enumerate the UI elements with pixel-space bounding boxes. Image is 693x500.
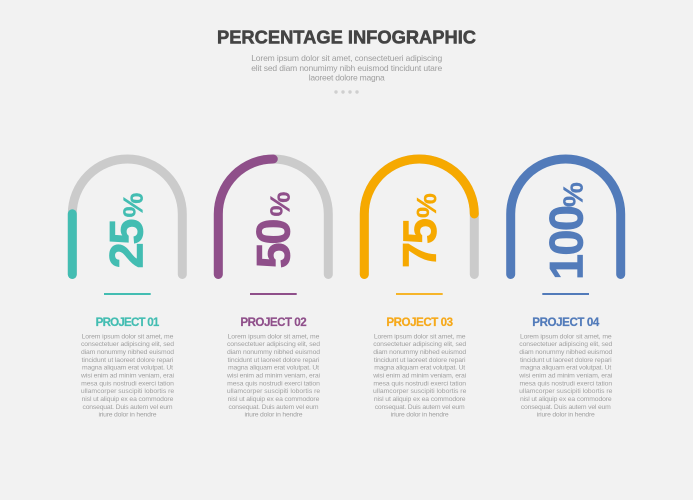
body text: iriure dolor in hendre xyxy=(537,412,595,419)
body text: tincidunt ut laoreet dolore repari xyxy=(520,357,612,364)
body text: magna aliquam erat volutpat. Ut xyxy=(520,365,611,372)
body text: wisi enim ad minim veniam, erai xyxy=(226,373,320,380)
body text: mesa quis nostrudi exerci tation xyxy=(81,380,174,387)
subtitle: laoreet dolore magna xyxy=(309,73,385,83)
body text: consectetuer adipiscing elit, sed xyxy=(373,341,466,348)
value 100%: % xyxy=(558,182,589,207)
body text xyxy=(226,333,320,419)
body text: nisl ut aliquip ex ea commodore xyxy=(374,396,466,403)
body text: wisi enim ad minim veniam, erai xyxy=(372,373,467,380)
body text xyxy=(518,333,613,419)
body text: diam nonummy nibhed euismod xyxy=(519,349,613,356)
divider xyxy=(250,293,297,295)
body text: diam nonummy nibhed euismod xyxy=(373,349,466,356)
body text: ullamcorper suscipiti lobortis re xyxy=(81,388,174,395)
heading: PROJECT 01 xyxy=(96,316,160,329)
body text: mesa quis nostrudi exerci tation xyxy=(227,380,320,387)
body text: nisl ut aliquip ex ea commodore xyxy=(520,396,612,403)
value 50%: % xyxy=(264,192,295,216)
body text: ullamcorper suscipiti lobortis re xyxy=(519,388,613,395)
panel: project 02 xyxy=(218,159,328,419)
value 75% xyxy=(393,193,446,268)
panel: project 04 xyxy=(511,159,621,419)
body text: Lorem ipsum dolor sit amet, me xyxy=(228,333,320,340)
value 75%: % xyxy=(411,193,442,218)
subtitle: Lorem ipsum dolor sit amet, consectetueri adipiscing xyxy=(251,53,442,63)
value 100%: 100 xyxy=(540,205,593,280)
body text: consequat. Duis autem vel eum xyxy=(375,404,465,411)
body text: consequat. Duis autem vel eum xyxy=(521,404,611,411)
subtitle xyxy=(251,53,442,83)
body text: magna aliquam erat volutpat. Ut xyxy=(228,365,319,372)
value 25% xyxy=(99,192,152,268)
heading: PROJECT 04 xyxy=(532,316,600,329)
body text: wisi enim ad minim veniam, erai xyxy=(80,373,174,380)
body text: magna aliquam erat volutpat. Ut xyxy=(374,365,465,372)
subtitle: elit sed diam nonumimy nibh euismod tincidunt utare xyxy=(251,63,442,73)
body text: Lorem ipsum dolor sit amet, me xyxy=(374,333,466,340)
body text xyxy=(372,333,467,419)
heading: PROJECT 02 xyxy=(240,316,307,329)
body text: consequat. Duis autem vel eum xyxy=(82,404,173,411)
arch gauge 50% xyxy=(218,159,328,274)
body text: tincidunt ut laoreet dolore repari xyxy=(228,357,320,364)
divider xyxy=(396,293,443,295)
body text: iriure dolor in hendre xyxy=(98,412,157,419)
body text: diam nonummy nibhed euismod xyxy=(227,349,320,356)
body text: ullamcorper suscipiti lobortis re xyxy=(227,388,320,395)
title: PERCENTAGE INFOGRAPHIC xyxy=(217,27,476,47)
divider xyxy=(104,293,151,295)
body text: Lorem ipsum dolor sit amet, me xyxy=(82,333,174,340)
body text xyxy=(80,333,174,419)
body text: consequat. Duis autem vel eum xyxy=(228,404,319,411)
panel: project 03 xyxy=(364,159,474,419)
body text: diam nonummy nibhed euismod xyxy=(81,349,174,356)
divider xyxy=(542,293,589,295)
value 25%: 25 xyxy=(99,218,152,268)
body text: ullamcorper suscipiti lobortis re xyxy=(373,388,467,395)
body text: nisl ut aliquip ex ea commodore xyxy=(228,396,320,403)
heading: PROJECT 03 xyxy=(386,316,454,329)
panel: project 01 xyxy=(72,159,182,419)
value 50%: 50 xyxy=(246,218,299,268)
arch gauge 75% xyxy=(364,159,474,274)
body text: consectetuer adipiscing elit, sed xyxy=(519,341,613,348)
body text: iriure dolor in hendre xyxy=(391,412,449,419)
body text: Lorem ipsum dolor sit amet, me xyxy=(520,333,612,340)
pagination dots xyxy=(334,90,359,94)
body text: nisl ut aliquip ex ea commodore xyxy=(82,396,174,403)
value 50% xyxy=(246,192,299,268)
body text: magna aliquam erat volutpat. Ut xyxy=(82,365,173,372)
body text: iriure dolor in hendre xyxy=(244,412,303,419)
value 75%: 75 xyxy=(393,218,446,268)
body text: wisi enim ad minim veniam, erai xyxy=(518,373,613,380)
body text: mesa quis nostrudi exerci tation xyxy=(519,380,612,387)
arch gauge 25% xyxy=(72,159,182,274)
body text: consectetuer adipiscing elit, sed xyxy=(81,341,174,348)
body text: consectetuer adipiscing elit, sed xyxy=(227,341,320,348)
body text: tincidunt ut laoreet dolore repari xyxy=(374,357,466,364)
body text: tincidunt ut laoreet dolore repari xyxy=(82,357,174,364)
body text: mesa quis nostrudi exerci tation xyxy=(373,380,466,387)
value 25%: % xyxy=(117,192,148,218)
arch gauge 100% xyxy=(511,159,621,274)
